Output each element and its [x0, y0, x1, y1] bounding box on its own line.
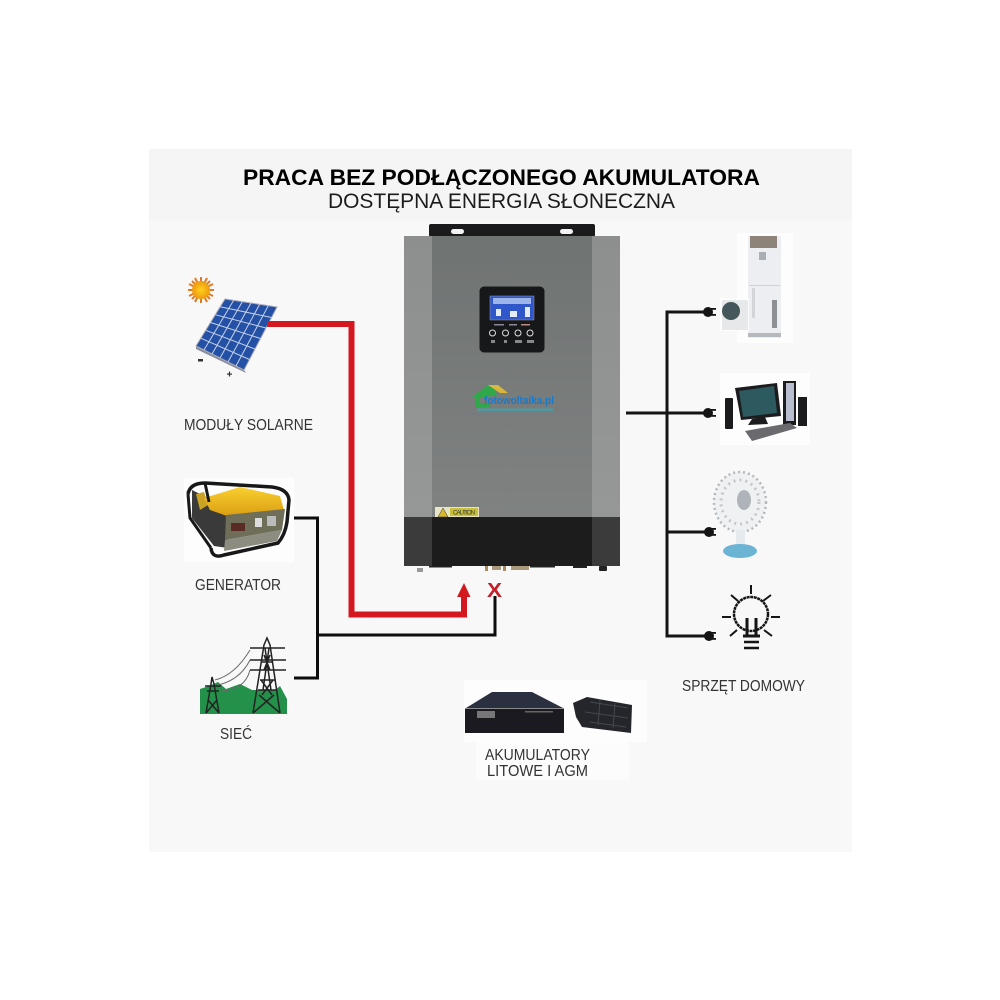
battery group — [464, 680, 647, 742]
icon: solar panel — [196, 299, 277, 376]
icon: fan — [714, 472, 766, 558]
button captions — [491, 340, 534, 343]
icon: plug 4 — [704, 631, 716, 641]
bottom connectors — [417, 566, 607, 572]
control display — [479, 286, 545, 353]
label: household equipment: SPRZĘT DOMOWY — [682, 678, 805, 695]
title: PRACA BEZ PODŁĄCZONEGO AKUMULATORA — [243, 165, 760, 190]
polarity marks — [198, 359, 232, 376]
icon: air conditioner and washer — [720, 233, 793, 343]
logo — [472, 385, 554, 411]
icon: generator — [184, 478, 294, 562]
icon: computer — [720, 373, 810, 445]
mounting bracket — [429, 224, 595, 237]
caution label — [435, 507, 479, 517]
buttons — [490, 330, 533, 336]
icon: plug 3 — [704, 527, 716, 537]
label: grid: SIEĆ — [220, 726, 252, 743]
inverter — [404, 224, 620, 572]
label: solar modules: MODUŁY SOLARNE — [184, 417, 313, 434]
subtitle: DOSTĘPNA ENERGIA SŁONECZNA — [328, 190, 675, 213]
logo: fotowoltaika.pl — [484, 395, 554, 407]
washing machine — [720, 298, 749, 331]
icon: sun — [188, 277, 214, 303]
status leds — [494, 324, 530, 326]
label: generator: GENERATOR — [195, 577, 281, 594]
icon: plug 2 — [703, 408, 716, 418]
label: batteries: AKUMULATORY — [485, 747, 590, 764]
background panel — [149, 149, 852, 852]
icon: light bulb — [722, 585, 780, 648]
icon: plug 1 — [703, 307, 716, 317]
inverter front panel — [432, 236, 592, 517]
icon: power grid — [200, 638, 287, 714]
arrow: red solar line — [267, 324, 470, 617]
connector: generator and grid — [294, 518, 495, 678]
icon: lithium battery — [465, 692, 564, 733]
connector: household loads — [626, 307, 716, 641]
label: batteries — [476, 742, 629, 780]
lcd screen — [490, 296, 534, 320]
caution label: CAUTION — [453, 510, 475, 516]
inverter side panels — [404, 236, 620, 517]
title band — [149, 149, 852, 221]
label: batteries: LITOWE I AGM — [487, 763, 588, 780]
icon: AGM battery — [573, 697, 632, 733]
inverter lower section — [404, 517, 620, 566]
disconnected mark: X — [487, 580, 503, 602]
